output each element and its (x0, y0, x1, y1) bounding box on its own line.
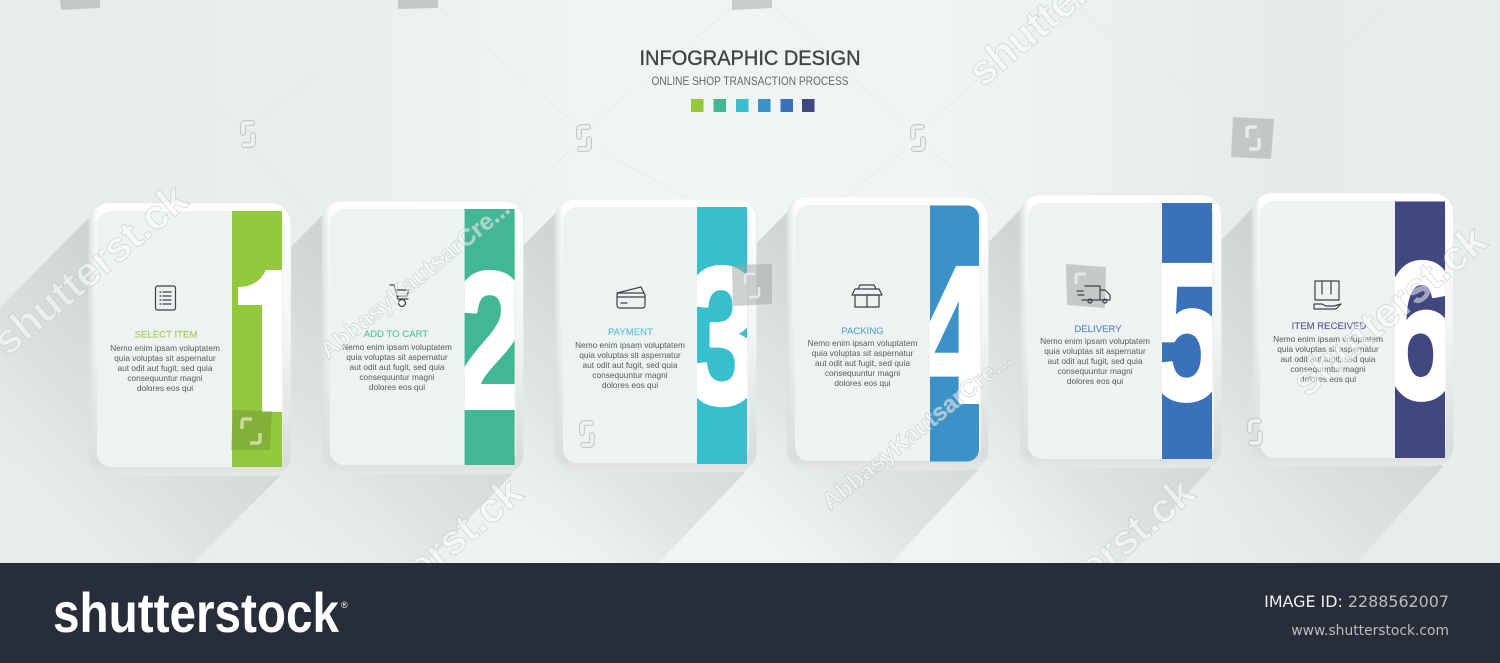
website: www.shutterstock.com (1291, 623, 1449, 639)
icon: box (852, 285, 882, 307)
watermark text: bottom centre-left: shutterst.ck (319, 467, 532, 657)
panel: step 1 select item (88, 203, 292, 476)
label: PAYMENT (608, 327, 653, 338)
description: aut odit aut fugit, sed quia (349, 362, 445, 372)
description: Nemo enim ipsam voluptatem (1040, 336, 1150, 346)
subheading: ONLINE SHOP TRANSACTION PROCESS (652, 75, 849, 88)
colour strip with number 3: 3 (683, 227, 761, 445)
description (342, 342, 452, 392)
description: quia voluptas sit aspernatur (346, 352, 448, 362)
description: Nemo enim ipsam voluptatem (575, 340, 685, 350)
description (575, 340, 685, 390)
description: aut odit aut fugit, sed quia (117, 363, 213, 373)
colour strip with number 5 (1162, 203, 1212, 459)
panel: step 3 payment (555, 199, 761, 472)
description: consequuntur magni (1057, 366, 1133, 376)
colour strip with number 2: 2 (451, 232, 529, 450)
description: dolores eos qui (1300, 374, 1356, 384)
description: dolores eos qui (834, 378, 891, 388)
colour strip with number 6 (1395, 202, 1445, 458)
description: quia voluptas sit aspernatur (812, 348, 913, 358)
colour strip with number 5: 5 (1148, 223, 1226, 441)
watermark text: right: shutterst.ck (1283, 215, 1496, 405)
watermark text: bottom centre-right: shutterst.ck (991, 467, 1204, 657)
description (1040, 336, 1150, 386)
description: aut odit aut fugit, sed quia (582, 360, 678, 370)
description: quia voluptas sit aspernatur (579, 350, 681, 360)
description: consequuntur magni (825, 368, 900, 378)
panel: step 2 add to cart (322, 201, 529, 474)
image id: IMAGE ID: 2288562007 (1264, 592, 1449, 611)
description: consequuntur magni (359, 372, 435, 382)
colour strip with number 2 (464, 209, 515, 465)
watermark tile (1066, 264, 1106, 308)
colour strip with number 4 (930, 206, 980, 462)
description: Nemo enim ipsam voluptatem (808, 338, 917, 348)
description: Nemo enim ipsam voluptatem (1273, 334, 1383, 344)
description: quia voluptas sit aspernatur (1277, 344, 1379, 354)
description: consequuntur magni (592, 370, 668, 380)
description: dolores eos qui (369, 382, 425, 392)
heading: INFOGRAPHIC DESIGN (640, 46, 860, 70)
description: quia voluptas sit aspernatur (1044, 346, 1146, 356)
description: quia voluptas sit aspernatur (114, 353, 216, 363)
description: dolores eos qui (602, 380, 658, 390)
description: consequuntur magni (1290, 364, 1366, 374)
label: SELECT ITEM (135, 330, 197, 340)
icon: parcel in hand (1314, 281, 1341, 309)
colour swatches (691, 99, 814, 112)
label: ADD TO CART (364, 329, 428, 340)
colour strip with number 1: 1 (226, 235, 330, 452)
icon: checklist (156, 286, 176, 310)
watermark grid lines (0, 0, 1500, 240)
description: Nemo enim ipsam voluptatem (110, 343, 220, 353)
watermark text: author centre: AbbasyKautsarCre... (817, 346, 1017, 516)
watermark icons (242, 123, 1260, 445)
description (1273, 334, 1383, 384)
label: ITEM RECEIVED (1292, 321, 1366, 332)
watermark text: author left: AbbasyKautsarCre... (315, 195, 515, 365)
title block (640, 46, 860, 112)
description (110, 343, 220, 393)
colour strip with number 6: 6 (1381, 222, 1459, 440)
colour strip with number 1 (232, 211, 282, 467)
panel: step 4 packing (787, 197, 992, 470)
registered mark: ® (341, 600, 348, 610)
shutterstock logo: shutterstock (53, 581, 340, 644)
panel: step 5 delivery (1020, 195, 1226, 468)
description: aut odit aut fugit, sed quia (1280, 354, 1376, 364)
description (808, 338, 917, 388)
watermark tiles (60, 0, 1274, 450)
description: dolores eos qui (137, 383, 193, 393)
description: consequuntur magni (127, 373, 203, 383)
description: Nemo enim ipsam voluptatem (342, 342, 452, 352)
label: PACKING (841, 326, 884, 337)
footer bar (0, 563, 1500, 663)
icon: delivery truck (1077, 286, 1110, 303)
label: DELIVERY (1074, 324, 1122, 335)
colour strip with number 3 (697, 207, 747, 464)
description: aut odit aut fugit, sed quia (815, 358, 910, 368)
icon: credit cards (617, 287, 645, 308)
icon: cart (390, 285, 409, 306)
panel: step 6 item received (1252, 193, 1459, 466)
description: dolores eos qui (1067, 376, 1123, 386)
colour strip with number 4: 4 (914, 226, 992, 444)
long shadows (0, 208, 1443, 564)
description: aut odit aut fugit, sed quia (1047, 356, 1143, 366)
